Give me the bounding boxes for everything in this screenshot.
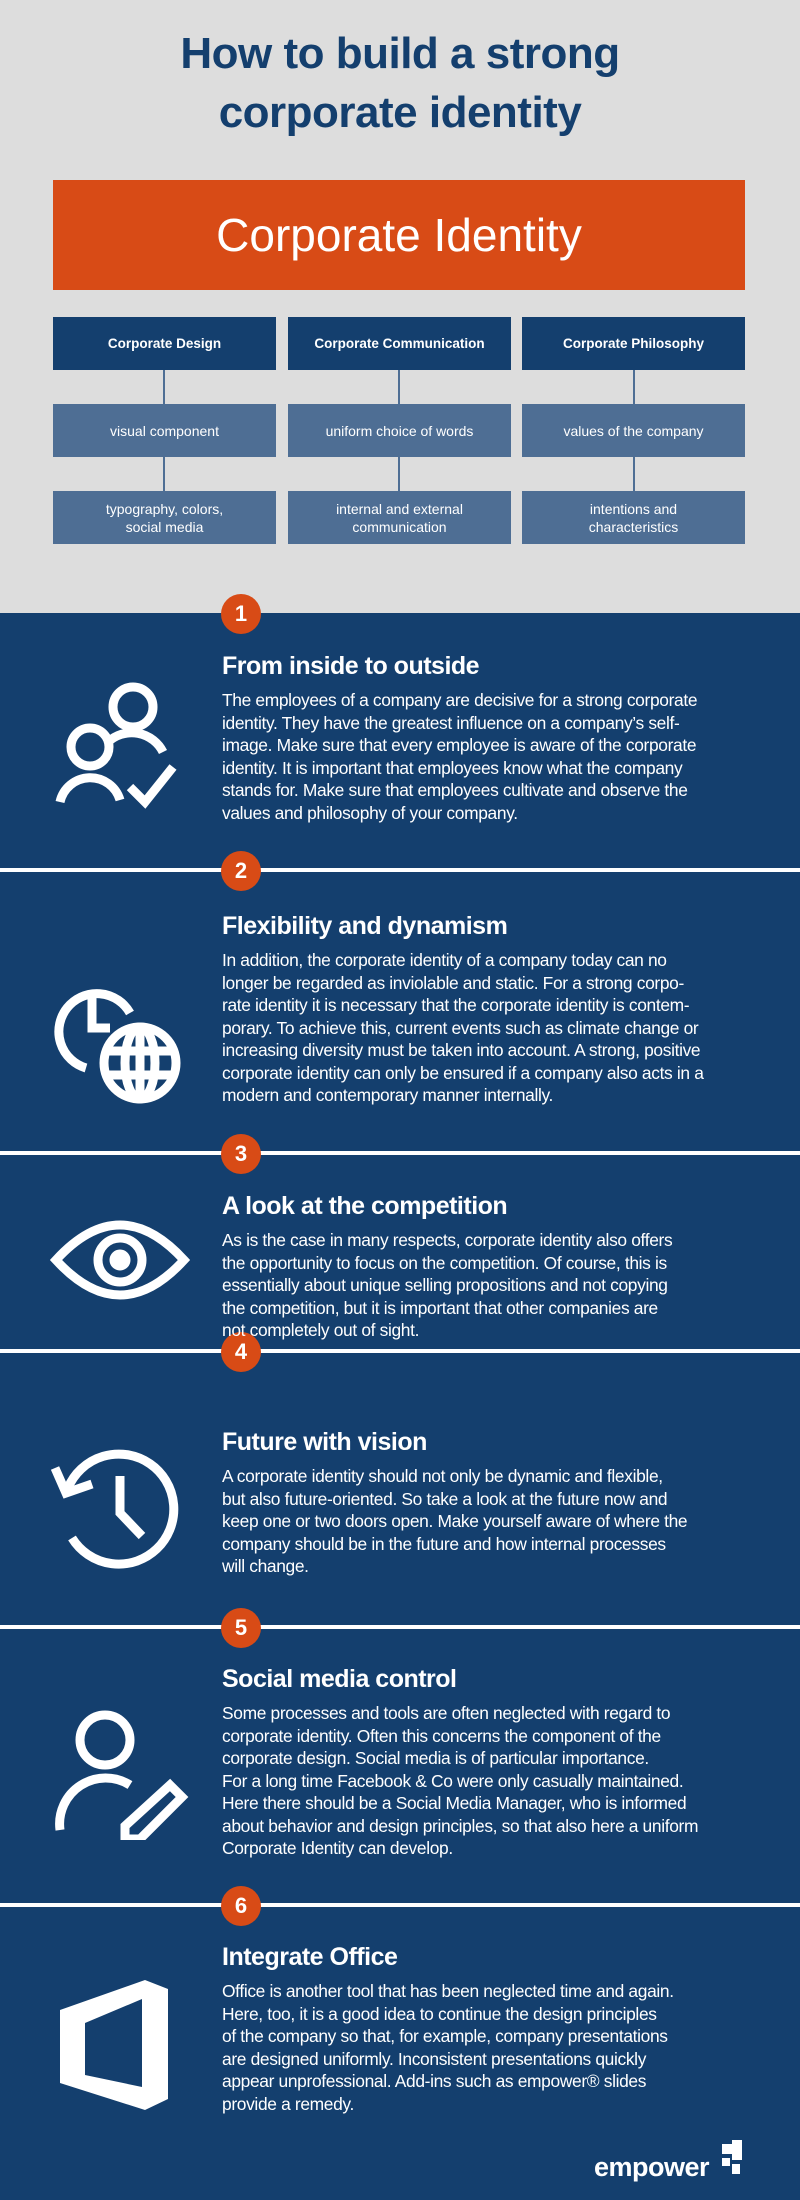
text: section 2: Flexibility and dynamism	[222, 912, 507, 940]
text: section 6: provide a remedy.	[222, 2094, 354, 2114]
text: section 3: the competition, but it is important that other companies are	[222, 1298, 658, 1318]
text: section 6	[222, 1943, 674, 2114]
text: section 5: corporate identity. Often this concerns the component of the	[222, 1726, 661, 1746]
box: uniform choice of words	[288, 404, 511, 457]
text: section 3: not completely out of sight.	[222, 1320, 419, 1340]
text: section 4: keep one or two doors open. Make yourself aware of where the	[222, 1511, 687, 1531]
text: section 6: are designed uniformly. Inconsistent presentations quickly	[222, 2048, 646, 2068]
text: section 6: appear unprofessional. Add-ins such as empower® slides	[222, 2071, 646, 2091]
box: intentions	[522, 491, 745, 544]
box: Corporate Philosophy	[522, 317, 745, 370]
box: Corporate Design: Corporate Design	[108, 336, 221, 350]
text: section 1	[222, 652, 697, 822]
text: section 1: identity. It is important that employees know what the company	[222, 758, 682, 778]
icon: eye	[50, 1220, 190, 1300]
text: section 5: For a long time Facebook & Co were only casually maintained.	[222, 1770, 683, 1790]
text: section 1: values and philosophy of your company.	[222, 802, 518, 822]
text: section 1: identity. They have the greatest influence on a company’s self-	[222, 712, 679, 732]
text: section 2	[222, 912, 704, 1105]
banner: Corporate Identity: Corporate Identity	[216, 209, 582, 261]
box: values of the company: values of the company	[563, 422, 704, 438]
text: section 3: essentially about unique selling propositions and not copying	[222, 1275, 668, 1295]
box: visual component: visual component	[110, 422, 219, 438]
badge 3	[221, 1134, 261, 1174]
text: section 4: A corporate identity should not only be dynamic and flexible,	[222, 1466, 663, 1486]
text: section 2: corporate identity can only be ensured if a company also acts in a	[222, 1062, 704, 1082]
icon: people check	[56, 682, 176, 809]
box: visual component	[53, 404, 276, 457]
box: uniform choice of words: uniform choice of words	[326, 422, 473, 438]
logo: empower: empower	[594, 2152, 709, 2182]
icon: clock globe	[54, 989, 180, 1104]
text: section 2: longer be regarded as inviolable and static. For a strong corpo-	[222, 972, 684, 992]
box: intentions: intentions and	[590, 500, 677, 516]
text: section 3	[222, 1192, 672, 1340]
text: section 2: rate identity it is necessary that the corporate identity is contem-	[222, 995, 689, 1015]
badge 1	[221, 594, 261, 634]
badge 5: 5	[235, 1615, 247, 1640]
box: internal and external	[288, 491, 511, 544]
box: internal and external: communication	[352, 518, 447, 534]
text: section 6: Integrate Office	[222, 1943, 397, 1971]
box: typography: social media	[126, 518, 203, 534]
text: section 3: A look at the competition	[222, 1192, 507, 1220]
text: section 5: Social media control	[222, 1665, 457, 1693]
text: section 6: of the company so that, for example, company presentations	[222, 2026, 668, 2046]
text: section 6: Office is another tool that has been neglected time and again.	[222, 1981, 674, 2001]
box: typography	[53, 491, 276, 544]
text: section 1: image. Make sure that every employee is aware of the corporate	[222, 735, 696, 755]
box: values of the company	[522, 404, 745, 457]
text: section 2: In addition, the corporate identity of a company today can no	[222, 950, 667, 970]
text: section 2: porary. To achieve this, current events such as climate change or	[222, 1018, 698, 1038]
badge 6: 6	[235, 1893, 247, 1918]
text: section 3: the opportunity to focus on the competition. Of course, this is	[222, 1252, 667, 1272]
text: section 4: but also future-oriented. So take a look at the future now and	[222, 1488, 667, 1508]
text: section 5	[222, 1665, 698, 1858]
box: internal and external: internal and external	[336, 500, 463, 516]
text: section 5: Corporate Identity can develop.	[222, 1838, 453, 1858]
badge 4: 4	[235, 1339, 247, 1364]
org chart	[53, 317, 745, 544]
icon: person pen	[55, 1710, 188, 1840]
text: section 2: increasing diversity must be taken into account. A strong, positive	[222, 1040, 700, 1060]
text: section 5: corporate design. Social media is of particular importance.	[222, 1748, 649, 1768]
text: section 4: company should be in the future and how internal processes	[222, 1534, 666, 1554]
box: Corporate Communication	[288, 317, 511, 370]
badge 3: 3	[235, 1141, 247, 1166]
icon: office	[60, 1980, 168, 2110]
text: section 5: Here there should be a Social Media Manager, who is informed	[222, 1793, 686, 1813]
text: section 1: From inside to outside	[222, 652, 479, 680]
banner: Corporate Identity	[53, 180, 745, 290]
box: Corporate Communication: Corporate Communication	[314, 336, 485, 350]
badge 5	[221, 1608, 261, 1648]
box: Corporate Design	[53, 317, 276, 370]
text: section 4	[222, 1428, 687, 1576]
logo: empower	[594, 2140, 742, 2182]
badge 4	[221, 1332, 261, 1372]
icon: history clock	[50, 1450, 178, 1569]
box: intentions: characteristics	[589, 518, 678, 534]
text: section 6: Here, too, it is a good idea to continue the design principles	[222, 2004, 657, 2024]
text: section 4: Future with vision	[222, 1428, 427, 1456]
box: Corporate Philosophy: Corporate Philosophy	[563, 336, 704, 350]
text: section 3: As is the case in many respects, corporate identity also offers	[222, 1230, 672, 1250]
badge 1: 1	[235, 601, 247, 626]
text: section 4: will change.	[222, 1556, 309, 1576]
text: section 1: stands for. Make sure that employees cultivate and observe the	[222, 780, 688, 800]
badge 2	[221, 851, 261, 891]
title	[180, 29, 620, 137]
title: corporate identity	[219, 88, 581, 137]
text: section 5: Some processes and tools are often neglected with regard to	[222, 1703, 670, 1723]
text: section 5: about behavior and design principles, so that also here a uniform	[222, 1816, 698, 1836]
text: section 2: modern and contemporary manner internally.	[222, 1085, 553, 1105]
badge 6	[221, 1886, 261, 1926]
blue background	[0, 613, 800, 2200]
box: typography: typography, colors,	[106, 500, 223, 516]
badge 2: 2	[235, 858, 247, 883]
title: How to build a strong	[180, 29, 620, 78]
text: section 1: The employees of a company are decisive for a strong corporate	[222, 690, 697, 710]
